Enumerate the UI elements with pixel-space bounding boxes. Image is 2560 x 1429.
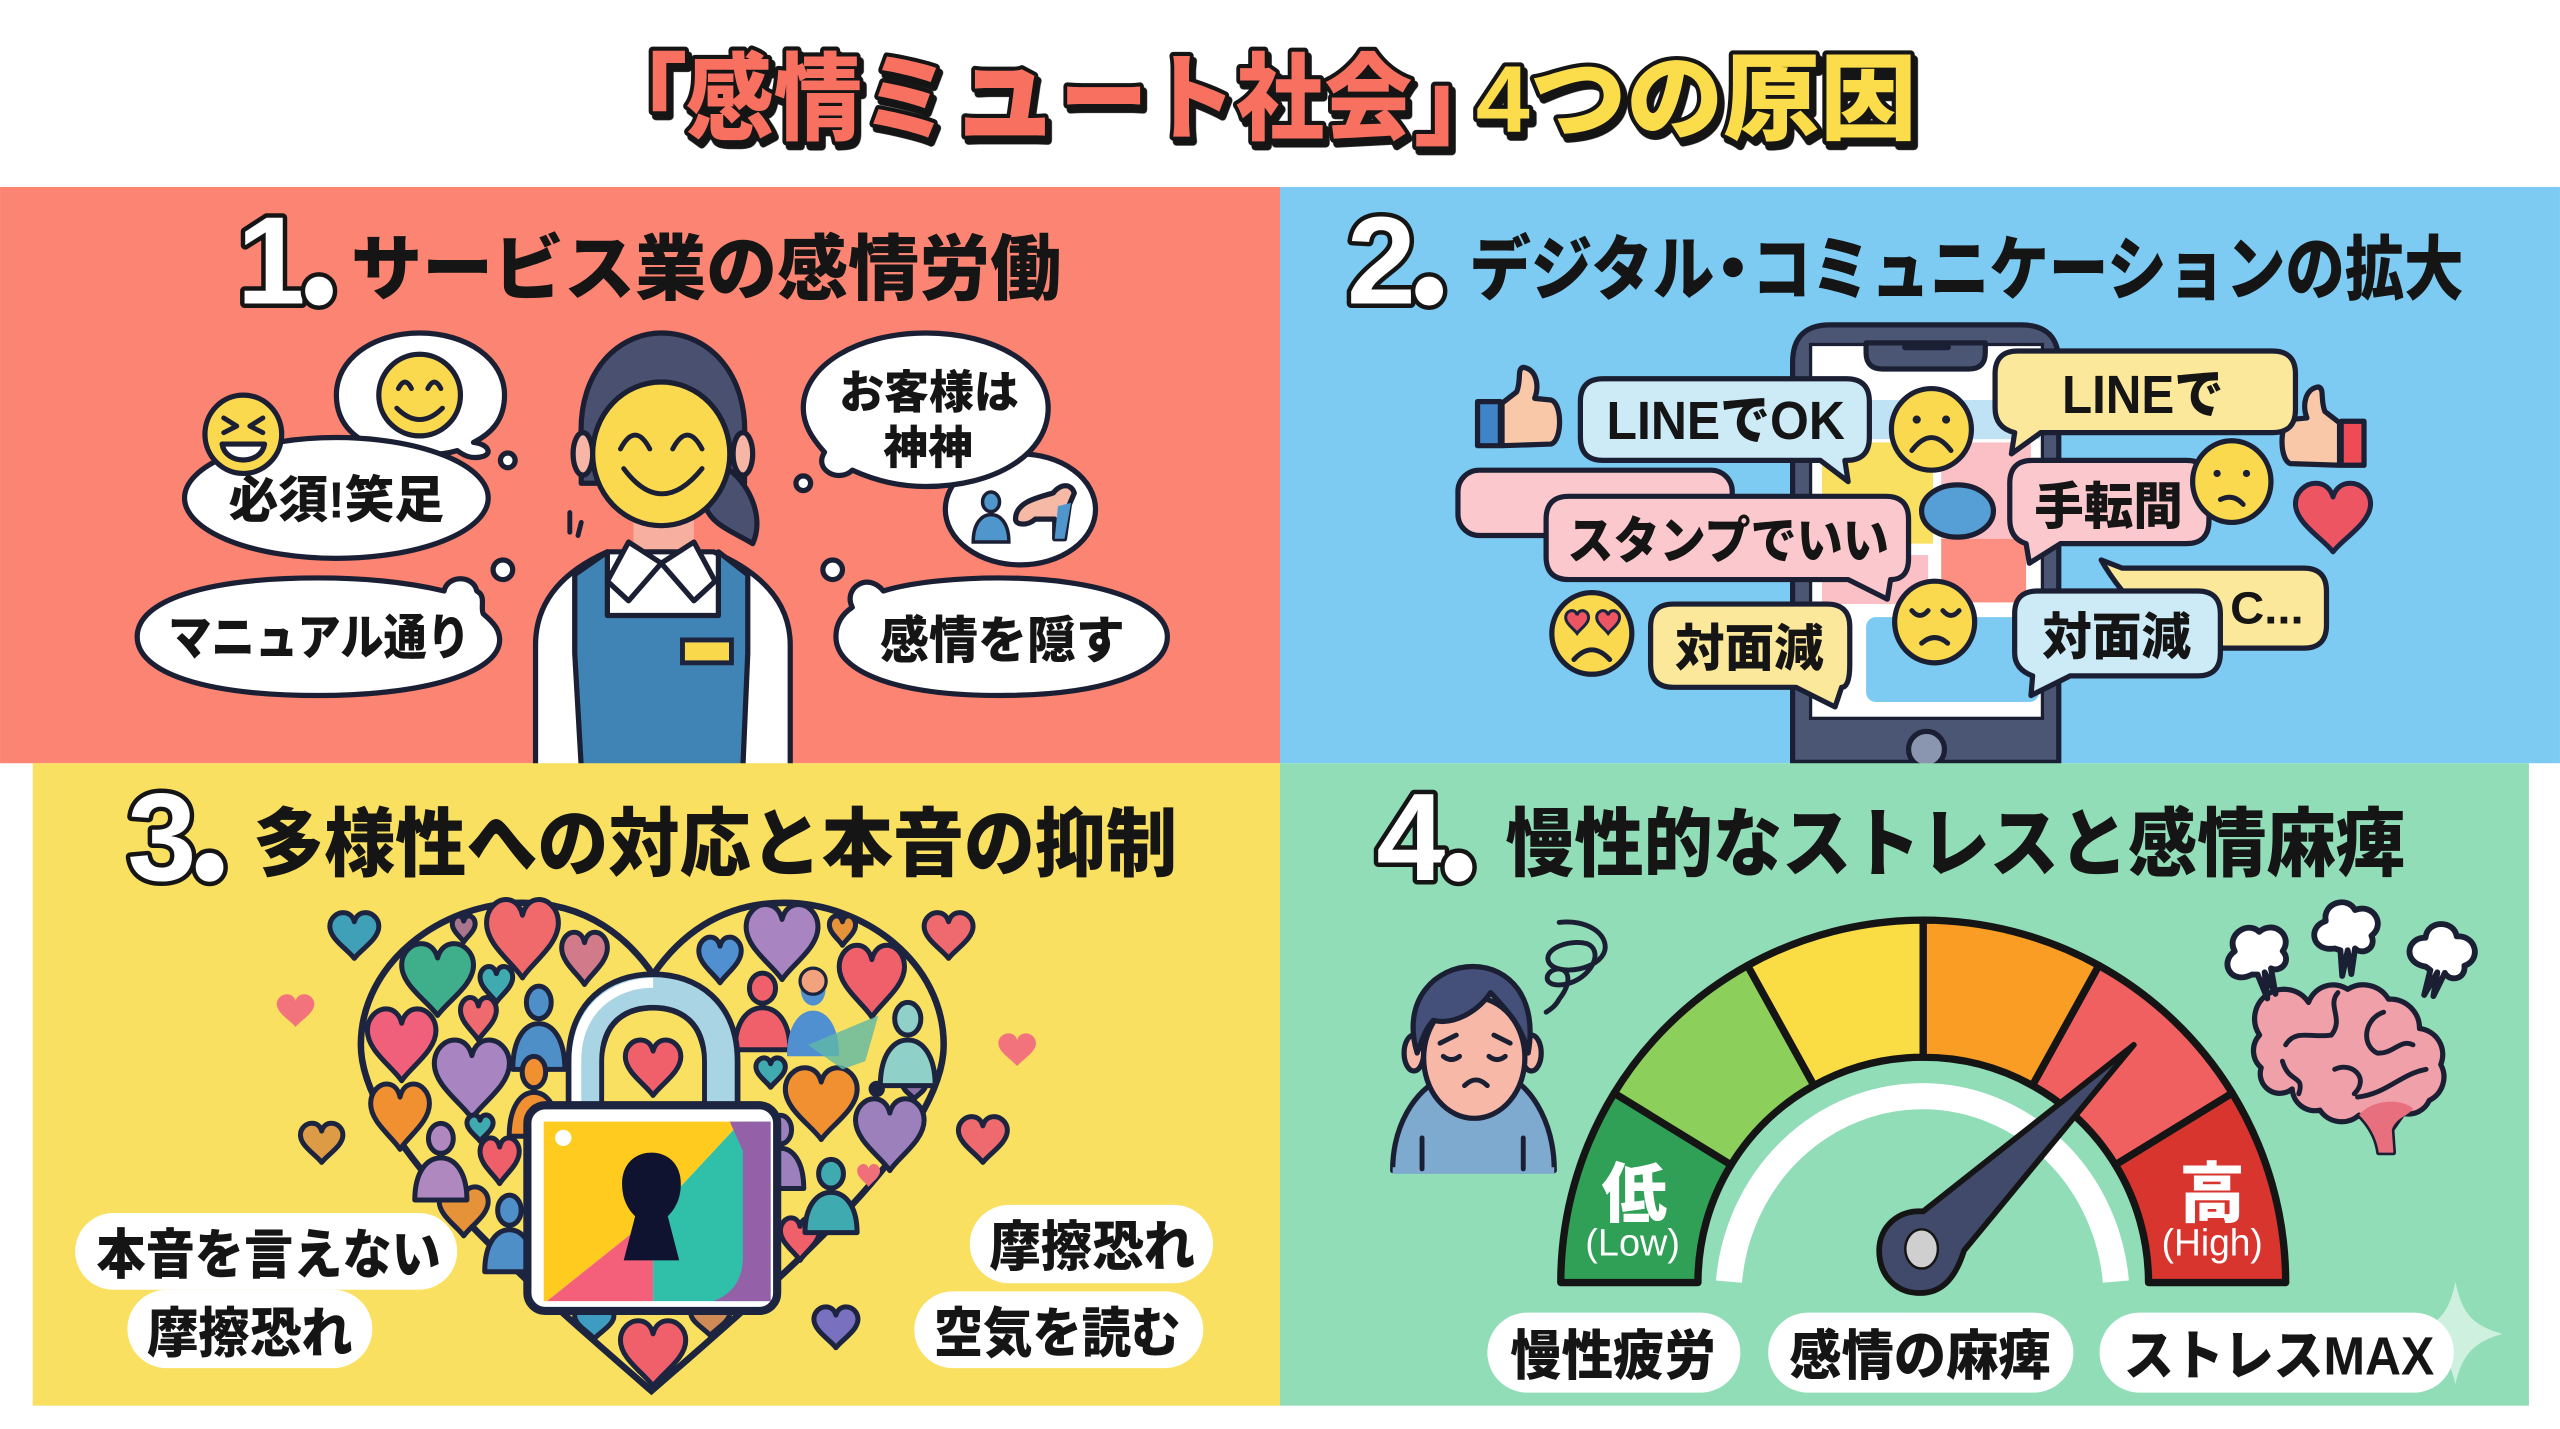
heading: panel 2: ・ [1698, 230, 1768, 309]
heading: panel 2: 2. [1347, 153, 1452, 342]
heading: panel 2 [1347, 153, 2464, 342]
icon: sad face [1891, 389, 1971, 470]
illustration: overheated brain [2253, 985, 2444, 1153]
title: 4つの原因 [1476, 47, 1917, 153]
chat bubble: 対面減 left: 対面減 [1675, 620, 1824, 677]
chat bubble: empty pink [1458, 470, 1732, 535]
heading: panel 1: サービス業の感情労働 [351, 230, 1061, 310]
speech bubble: マニュアル通り [137, 560, 513, 695]
chat bubble: 対面減 right [2015, 591, 2220, 695]
speech bubble: 必須!笑足: 必須!笑足 [229, 472, 444, 529]
icon: laughing face [205, 395, 282, 473]
gauge label: high [2162, 1157, 2263, 1263]
gauge label: high: 高 [2180, 1157, 2245, 1230]
heading: panel 4: 慢性的なストレスと感情麻痺 [1505, 802, 2405, 886]
title [593, 26, 1917, 158]
pill: 本音を言えない: 本音を言えない [96, 1225, 441, 1285]
chat bubble: LINEでOK: LINEでOK [1607, 391, 1845, 451]
icon: blue dot [1922, 485, 1993, 537]
pill: 空気を読む: 空気を読む [934, 1304, 1180, 1364]
pill: ストレスMAX: ストレスMAX [2124, 1327, 2434, 1387]
speech bubble: 感情を隠す [823, 560, 1167, 695]
pill: 摩擦恐れ left: 摩擦恐れ [147, 1304, 353, 1364]
pill: 摩擦恐れ left [127, 1290, 372, 1368]
panel: 3 diversity [33, 729, 1280, 1406]
illustration: big heart of small hearts and people [361, 900, 944, 1391]
chat bubble: 対面減 left [1651, 604, 1850, 707]
icon: teary heart-eyed face [1552, 593, 1632, 674]
heading: panel 4 [1376, 729, 2405, 918]
illustration: smiling clerk [536, 333, 790, 767]
gauge label: low [1585, 1157, 1680, 1263]
illustration: padlock [527, 983, 777, 1311]
chat bubble: LINEで [1995, 351, 2295, 454]
heading: panel 3: 3. [127, 729, 232, 918]
speech bubble: person and hand icons [945, 454, 1096, 565]
icon: steam puffs [2218, 902, 2481, 1007]
speech bubble: お客様は 神神: 神神 [883, 423, 973, 474]
illustration: tired person [1393, 966, 1554, 1171]
pill: ストレスMAX [2100, 1313, 2454, 1393]
speech bubble: 必須!笑足 [185, 438, 488, 558]
heading: panel 3: 多様性への対応と本音の抑制 [253, 802, 1177, 886]
speech bubble: お客様は 神神: お客様は [839, 367, 1019, 418]
gauge label: high: (High) [2162, 1221, 2263, 1263]
chat bubble: スタンプでいい [1546, 496, 1909, 599]
panel: 4 chronic stress [1280, 729, 2529, 1406]
icon: thumbs up right [2282, 387, 2364, 465]
icon: sparkle [2408, 1282, 2503, 1384]
chat bubble: 手転間 [2010, 460, 2209, 563]
speech bubble: マニュアル通り: マニュアル通り [168, 612, 470, 666]
speech bubble: 感情を隠す: 感情を隠す [880, 612, 1125, 669]
pill: 感情の麻痺: 感情の麻痺 [1789, 1327, 2051, 1387]
illustration: smartphone [1793, 325, 2059, 767]
gauge needle [1879, 1045, 2134, 1293]
pill: 感情の麻痺 [1768, 1313, 2073, 1393]
panel: 1 service work [0, 153, 1280, 767]
chat bubble: 対面減 right: 対面減 [2042, 609, 2191, 666]
heading: panel 2: デジタル [1469, 230, 1714, 309]
title: 「 [593, 47, 687, 153]
speech bubble: お客様は 神神 [796, 333, 1048, 491]
pill: 摩擦恐れ right: 摩擦恐れ [989, 1217, 1195, 1277]
pill: 慢性疲労 [1487, 1313, 1740, 1393]
heading: panel 3 [127, 729, 1177, 918]
chat bubble: LINEで: LINEで [2062, 365, 2224, 425]
chat bubble: 手転間: 手転間 [2034, 478, 2183, 535]
icon: dizzy swirl [1546, 922, 1605, 1012]
pill: 慢性疲労: 慢性疲労 [1510, 1327, 1716, 1387]
title: 」 [1414, 52, 1509, 158]
hearts floating around big heart [277, 913, 1036, 1348]
speech bubble: smile icon [336, 333, 515, 468]
icon: heart [2295, 483, 2371, 552]
title: 感情ミュート社会 [686, 26, 1412, 157]
heading: panel 4: 4. [1376, 729, 1481, 918]
chart: stress gauge [1561, 920, 2286, 1293]
chat bubble: C...: C... [2230, 583, 2304, 634]
icon: uneasy face [2193, 441, 2271, 522]
panel: 2 digital communication [1280, 153, 2560, 767]
chat bubble: LINEでOK [1580, 379, 1869, 482]
gauge label: low: (Low) [1585, 1221, 1680, 1263]
chat bubble: C... [2101, 560, 2326, 648]
gauge label: low: 低 [1602, 1157, 1668, 1230]
heading: panel 1: 1. [237, 153, 342, 342]
heading: panel 1 [237, 153, 1061, 342]
icon: thumbs up left [1478, 367, 1560, 446]
icon: downcast face [1895, 581, 1975, 663]
chat bubble: スタンプでいい: スタンプでいい [1567, 512, 1889, 569]
pill: 摩擦恐れ right [970, 1205, 1213, 1283]
